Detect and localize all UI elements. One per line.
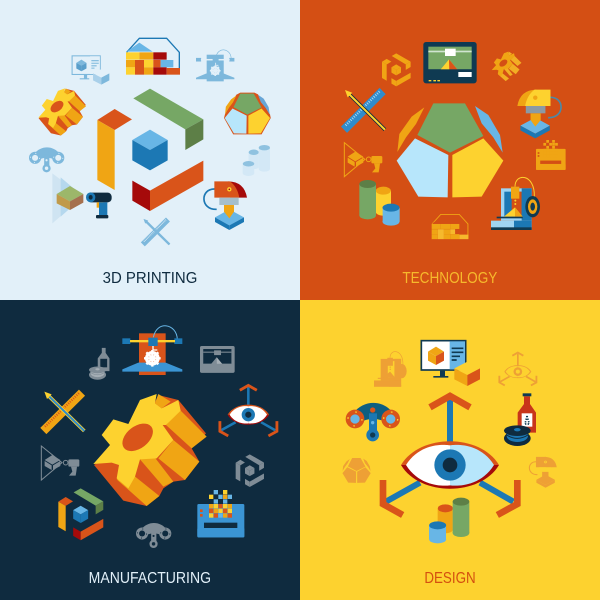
panel: design [300, 300, 600, 600]
label: design: DESIGN [424, 570, 476, 587]
icon: cylinders [359, 180, 400, 226]
icon: logo colour [58, 488, 103, 540]
icon: brick house [126, 38, 180, 75]
label: 3D printing: 3D PRINTING [103, 270, 197, 287]
icon: monitor with cube [421, 341, 480, 386]
icon: dodecahedron [342, 457, 371, 483]
icon: eye with arrows [499, 353, 536, 385]
icon: desktop with cube [72, 56, 109, 85]
icon: gear [492, 52, 521, 81]
icon: ruler and pencil [143, 219, 169, 244]
label: manufacturing: MANUFACTURING [89, 570, 211, 587]
panel: 3D printing [0, 0, 300, 300]
panel: manufacturing [0, 300, 300, 600]
icon: dodecahedron [224, 93, 271, 134]
icon: brick house [432, 214, 468, 239]
icon: caliper tool [136, 523, 171, 548]
icon: ruler and pencil [344, 90, 385, 130]
icon: scanner projection [52, 173, 112, 223]
icon: gear [38, 88, 86, 135]
icon: pixel printer [536, 140, 566, 170]
icon: logo outline [236, 454, 264, 487]
icon: tablet with printer screen [423, 42, 477, 83]
icon: 3D printer with spool [491, 177, 540, 230]
icon: scanner projection [41, 446, 79, 480]
icon: pixel printer [197, 490, 244, 537]
icon: eye with arrows [220, 385, 277, 436]
icon: caliper tool [346, 403, 400, 441]
icon: bottle and spool [89, 346, 109, 380]
icon: printer [196, 50, 234, 81]
icon: logo outline [382, 53, 411, 86]
icon: scanner projection [344, 143, 382, 177]
icon: central dodecahedron [395, 101, 505, 199]
icon: cylinders [243, 145, 270, 176]
icon: ruler and pencil [43, 392, 84, 431]
icon: 3D printer with spool [374, 352, 407, 387]
icon: tablet with printer screen [200, 346, 235, 373]
icon: cylinders [429, 498, 469, 543]
panel: technology [300, 0, 600, 300]
icon: print head on platform [204, 181, 247, 230]
icon: central gear [93, 394, 207, 506]
label: technology: TECHNOLOGY [402, 270, 497, 287]
icon: print head [517, 90, 561, 138]
icon: central 3D printing logo with cube [97, 89, 203, 211]
icon: print head [529, 457, 557, 488]
icon: caliper tool [29, 147, 64, 172]
icon: central eye with arrows [383, 396, 517, 515]
icon: printer building gear [122, 326, 182, 375]
icon: bottle and spool [504, 393, 536, 446]
